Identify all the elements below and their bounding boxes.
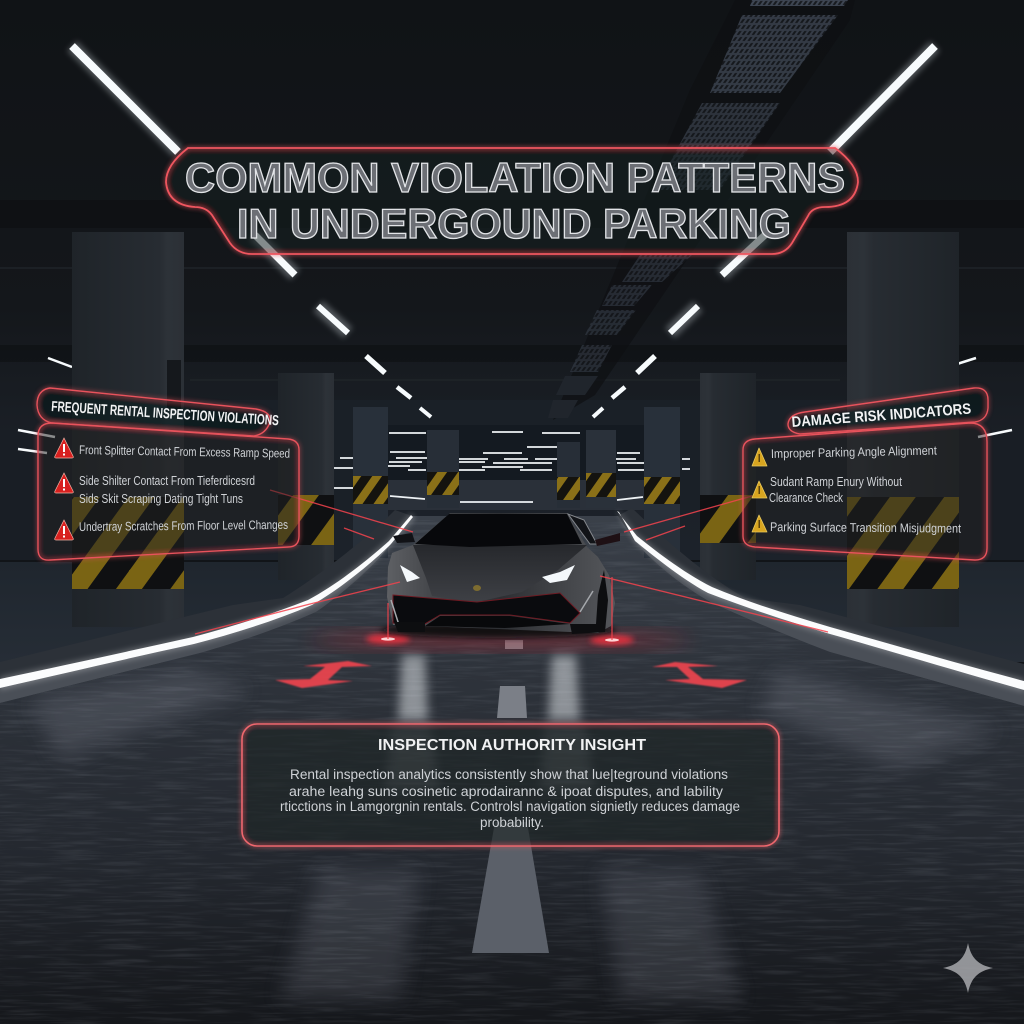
floor — [0, 516, 1024, 1024]
right panel items: Clearance Check — [769, 491, 844, 505]
car front air intake — [393, 593, 580, 625]
insight body text: Rental inspection analytics consistently show that lue|teground violations — [290, 767, 728, 782]
car wheels — [394, 570, 608, 634]
title text: IN UNDERGOUND PARKING — [237, 200, 791, 247]
right panel heading: DAMAGE RISK INDICATORS — [791, 401, 972, 431]
large pillar left — [72, 232, 184, 627]
left panel items: Undertray Scratches From Floor Level Changes — [79, 518, 288, 534]
left panel items: Sids Skit Scraping Dating Tight Tuns — [79, 492, 243, 506]
icon: red warning triangle 1 — [55, 438, 73, 458]
icon: red warning triangle 3 — [55, 520, 73, 540]
insight body text: probability. — [480, 815, 544, 830]
floor arrow right — [652, 662, 747, 688]
right panel items: Improper Parking Angle Alignment — [771, 444, 937, 461]
right panel body — [743, 423, 987, 560]
title text — [185, 154, 845, 247]
car badge — [473, 585, 481, 591]
insight body text: arahe leahg suns cosinetic aprodairannc & ipoat disputes, and lability — [289, 784, 723, 799]
left panel items: Front Splitter Contact From Excess Ramp Speed — [79, 443, 290, 461]
left panel body — [38, 423, 299, 560]
icon: yellow warning triangle 1 — [752, 448, 767, 466]
right panel items — [769, 444, 962, 536]
right panel items: Parking Surface Transition Misjudgment — [770, 520, 962, 536]
distant pillars left — [278, 373, 459, 580]
ceiling ventilation duct — [548, 0, 855, 420]
red laser glow on floor — [310, 633, 690, 647]
laser callout lines — [195, 490, 828, 640]
title outline — [166, 148, 858, 254]
panel: damage risk indicators — [743, 388, 988, 560]
floor arrow left — [275, 661, 372, 688]
left panel heading: FREQUENT RENTAL INSPECTION VIOLATIONS — [51, 399, 280, 429]
left panel items: Side Shilter Contact From Tieferdicesrd — [79, 474, 255, 488]
icon: sparkle watermark — [943, 943, 993, 993]
car windshield — [415, 514, 582, 547]
icon: yellow warning triangle 2 — [752, 481, 767, 498]
background: parking garage ceiling — [0, 0, 1024, 560]
insight body text — [280, 767, 740, 830]
left panel header — [37, 388, 270, 436]
insight box — [242, 724, 779, 846]
insight heading: INSPECTION AUTHORITY INSIGHT — [378, 737, 647, 754]
large pillar right — [847, 232, 959, 627]
ceiling light strips — [18, 46, 1012, 453]
panel: inspection authority insight — [242, 724, 779, 846]
icon: yellow warning triangle 3 — [752, 515, 767, 532]
panel: frequent rental inspection violations — [37, 388, 299, 560]
left panel items — [79, 443, 290, 534]
right panel header — [788, 388, 988, 434]
car hood — [413, 545, 587, 602]
curbs with light strips — [0, 508, 1024, 706]
distant pillars right — [557, 373, 756, 580]
insight body text: rticctions in Lamgorgnin rentals. Controlsl navigation signietly reduces damage — [280, 799, 740, 814]
icon: red warning triangle 2 — [55, 473, 73, 493]
far lights and back garage bars — [333, 432, 690, 502]
right panel items: Sudant Ramp Enury Without — [770, 475, 902, 489]
car mirrors — [393, 533, 620, 546]
car body — [387, 513, 615, 633]
car headlights — [400, 565, 575, 583]
title text: COMMON VIOLATION PATTERNS — [185, 154, 845, 201]
title panel — [166, 148, 858, 254]
road centre dashes — [472, 640, 549, 953]
sports car — [380, 513, 620, 638]
